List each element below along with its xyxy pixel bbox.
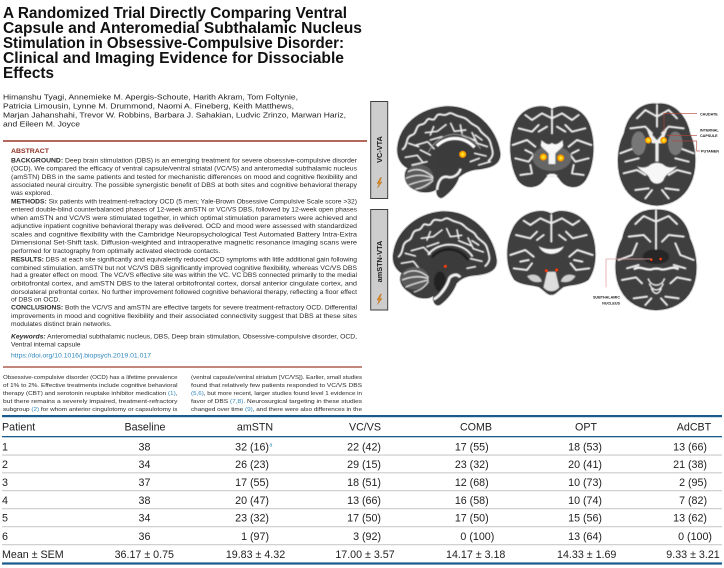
table row: patient 6: 36 (139, 531, 150, 543)
abstract conclusions section: CONCLUSIONS: Both the VC/VS and amSTN are effective targets for severe treatment-refractory OCD. Differential (11, 305, 358, 312)
keywords (11, 333, 357, 349)
table row: patient 2 (2, 459, 707, 471)
abstract results section: of DBS on OCD. (11, 297, 60, 304)
abstract methods section: adjunctive inpatient cognitive behavioral therapy was delivered. OCD and mood were assessed with standardized (11, 223, 357, 230)
table row: mean and SEM: 14.17 ± 3.18 (446, 549, 505, 561)
abstract background section (10, 158, 358, 197)
table row: patient 5: 23 (32) (235, 513, 269, 525)
title: Effects (3, 65, 54, 82)
brain scan: VC-VTA axial (618, 103, 696, 206)
table row: patient 4: 13 (66) (347, 495, 381, 507)
introduction text column 1: of 1% to 2%. Effective treatments include cognitive behavioral (3, 383, 178, 389)
table header: AdCBT (677, 422, 712, 434)
abstract conclusions section (11, 305, 358, 328)
introduction text column 2: (5,6), but more recent, larger studies found level 1 evidence in (191, 391, 362, 397)
table row: patient 5 (2, 513, 707, 525)
abstract results section: orbitofrontal cortex, and amSTN DBS to the lateral orbitofrontal cortex, dorsal anterior cingulate cortex, and (11, 280, 357, 288)
label: putamen: PUTAMEN (701, 149, 719, 153)
table row: patient 3: 17 (55) (235, 477, 269, 489)
table row: patient 1: a (270, 442, 272, 448)
table row: patient 6 (2, 531, 712, 543)
author list: Marjan Jahanshahi, Trevor W. Robbins, Barbara J. Sahakian, Ludvic Zrinzo, Marwan Hariz, (3, 112, 346, 120)
keywords: Ventral internal capsule (11, 342, 81, 349)
table row: patient 3: 2 (95) (679, 477, 707, 489)
stimulation hotspot (459, 150, 467, 158)
table row: patient 5: 5 (2, 513, 8, 525)
introduction text column 2: (ventral capsule/ventral striatum [VC/VS]). Earlier, small studies (191, 375, 362, 381)
abstract results section: combined stimulation. amSTN but not VC/VS DBS significantly improved cognitive flexibility, whereas VC/VS DBS (11, 265, 358, 272)
abstract conclusions section: improvements in mood and cognitive flexibility and their associated connectivity suggest that DBS at these sites (11, 313, 358, 320)
table row: patient 5: 13 (62) (673, 513, 707, 525)
divider: lower red rule (3, 366, 362, 368)
introduction text column 1: therapy (CBT) and serotonin reuptake inhibitor medication (1), (3, 391, 178, 397)
abstract results section: RESULTS: DBS at each site significantly and equivalently reduced OCD symptoms with little additional gain following (11, 256, 357, 264)
table row: patient 4: 4 (2, 495, 8, 507)
table row: patient 6: 13 (64) (568, 531, 602, 543)
label: internal capsule: INTERNAL (700, 128, 719, 132)
introduction text column 1 (3, 375, 178, 413)
abstract results section: dorsolateral prefrontal cortex. No further improvement followed cognitive behavioral therapy, reflecting a floor effect (11, 289, 357, 296)
table row: patient 1: 1 (2, 442, 8, 454)
table row: patient 3: 3 (2, 477, 8, 489)
abstract (10, 148, 358, 360)
table row: patient 2: 34 (139, 459, 150, 471)
label text: VC-VTA: VC-VTA (375, 135, 384, 163)
callout: subthalamic nucleus label: NUCLEUS (602, 301, 621, 305)
label panel: amSTN-VTA (371, 210, 388, 310)
abstract methods section: METHODS: Six patients with treatment-refractory OCD (5 men; Yale-Brown Obsessive Compulsive Scale score >32) (11, 198, 357, 206)
callout: subthalamic nucleus label: SUBTHALAMIC (593, 296, 620, 300)
title: Stimulation in Obsessive-Compulsive Disorder: (3, 35, 344, 52)
table row: patient 4: 16 (58) (455, 495, 489, 507)
table row: patient 5: 34 (139, 513, 150, 525)
abstract conclusions section: modulates distinct brain networks. (11, 321, 112, 328)
table row: patient 6: 3 (92) (353, 531, 381, 543)
table header (2, 422, 712, 434)
label panel: VC-VTA (371, 102, 388, 198)
author list: and Eileen M. Joyce (3, 122, 80, 128)
brain scan: amSTN-VTA coronal (507, 211, 596, 295)
abstract results section (11, 256, 358, 304)
table row: patient 2: 2 (2, 459, 8, 471)
abstract methods section: Dimensional Set-Shift task. Diffusion-weighted and intraoperative magnetic resonance imaging scans were (11, 240, 357, 247)
table row: patient 5: 15 (56) (568, 513, 602, 525)
author list (3, 94, 346, 128)
abstract methods section: performed for tractography from optimally activated electrode contacts. (11, 248, 220, 255)
table row: patient 1: 18 (53) (568, 442, 602, 454)
table row: mean and SEM: 9.33 ± 3.21 (666, 549, 720, 561)
table row: mean and SEM (2, 549, 720, 561)
table row: patient 2: 26 (23) (235, 459, 269, 471)
icon: lightning bolt (377, 178, 382, 188)
table row: patient 1 (2, 442, 707, 454)
table row: patient 6: 0 (100) (460, 531, 494, 543)
keywords: Keywords: Anteromedial subthalamic nucleus, DBS, Deep brain stimulation, Obsessive-compulsive disorder, OCD, (11, 333, 357, 340)
title: Capsule and Anteromedial Subthalamic Nucleus (3, 20, 362, 37)
table: patient OCD scores (2, 415, 722, 565)
abstract methods section: scales and cognitive flexibility with the Cambridge Neuropsychological Test Automated Battery Intra-Extra (11, 231, 357, 238)
abstract methods section: when amSTN and VC/VS were stimulated together, in which optimal stimulation parameters were achieved and (10, 215, 357, 222)
table row: patient 1: 17 (55) (455, 442, 489, 454)
table header: VC/VS (349, 422, 381, 434)
table row: patient 4: 7 (82) (679, 495, 707, 507)
brain scan: VC-VTA coronal (510, 106, 594, 187)
table row: patient 3: 37 (139, 477, 150, 489)
title: Clinical and Imaging Evidence for Dissociable (3, 50, 344, 67)
table row: patient 2: 21 (38) (673, 459, 707, 471)
introduction text column 1: but there remains a severely impaired, treatment-refractory (3, 399, 178, 405)
abstract methods section (10, 198, 358, 255)
stimulation hotspots (650, 257, 662, 261)
introduction text column 1: subgroup (2) for whom anterior cingulotomy or capsulotomy is (3, 407, 178, 413)
table row: patient 6: 6 (2, 531, 8, 543)
abstract results section: had a greater effect on mood. The VC/VS effective site was within the VC. VC DBS connected primarily to the medial (11, 272, 358, 279)
table header: Patient (2, 422, 35, 434)
table row: patient 2: 23 (32) (455, 459, 489, 471)
title (3, 5, 362, 82)
table row: patient 4: 10 (74) (568, 495, 602, 507)
stimulation hotspots (645, 137, 667, 144)
table header: Baseline (124, 422, 166, 434)
brain scan: amSTN-VTA axial (615, 209, 697, 311)
table row: mean and SEM: 17.00 ± 3.57 (335, 549, 395, 561)
introduction text column 2: favor of DBS (7,8) . Neurosurgical targeting in these studies (191, 399, 362, 405)
title: A Randomized Trial Directly Comparing Ventral (3, 5, 347, 22)
table row: patient 4: 38 (139, 495, 150, 507)
abstract background section: associated neural circuitry. The possible synergistic benefit of DBS at both sites and cognitive behavioral therapy (11, 182, 358, 189)
icon: lightning bolt (377, 294, 382, 304)
table row: patient 1: 13 (66) (673, 442, 707, 454)
divider: top red rule (3, 140, 367, 142)
stimulation hotspots (539, 153, 565, 162)
table row: patient 2: 29 (15) (347, 459, 381, 471)
callout: anatomical labels for VC-VTA axial (664, 112, 719, 153)
table row: patient 3 (2, 477, 707, 489)
abstract background section: was explored. (10, 190, 52, 197)
table row: patient 1: 32 (16) (235, 442, 269, 454)
table row: patient 1: 38 (139, 442, 150, 454)
label: internal capsule: CAPSULE (700, 134, 718, 138)
author list: Patricia Limousin, Lynne M. Drummond, Naomi A. Fineberg, Keith Matthews, (3, 104, 294, 110)
table row: patient 6: 1 (97) (241, 531, 269, 543)
introduction text column 2 (191, 375, 362, 413)
brain scan: VC-VTA sagittal (397, 106, 501, 198)
label text: amSTN-VTA: amSTN-VTA (375, 240, 384, 282)
label: caudate: CAUDATE (700, 112, 718, 116)
table row: patient 1: 22 (42) (347, 442, 381, 454)
table row: mean and SEM: 36.17 ± 0.75 (115, 549, 174, 561)
table row: patient 4: 20 (47) (235, 495, 269, 507)
table row: patient 2: 20 (41) (568, 459, 602, 471)
table row: patient 5: 17 (50) (455, 513, 489, 525)
table row: patient 5: 17 (50) (347, 513, 381, 525)
table row: mean and SEM: 14.33 ± 1.69 (557, 549, 616, 561)
introduction text column 1: Obsessive-compulsive disorder (OCD) has a lifetime prevalence (3, 375, 178, 381)
abstract background section: (amSTN) DBS in the same patients and tested for mechanistic differences on mood and cognitive flexibility and (11, 174, 357, 181)
table header: OPT (575, 422, 597, 434)
callout: subthalamic nucleus label (593, 259, 651, 305)
table row: mean and SEM: 19.83 ± 4.32 (226, 549, 285, 561)
table row: patient 4 (2, 495, 707, 507)
table row: patient 3: 10 (73) (568, 477, 602, 489)
abstract methods section: entered double-blind counterbalanced phases of 12-week amSTN or VC/VS DBS, followed by 12-week open phases (11, 207, 358, 214)
table header: amSTN (237, 422, 273, 434)
table row: patient 3: 18 (51) (347, 477, 381, 489)
stimulation hotspot (443, 264, 447, 268)
table row: patient 6: 0 (100) (678, 531, 712, 543)
stimulation hotspots (544, 268, 559, 273)
table row: patient 3: 12 (68) (455, 477, 489, 489)
abstract background section: (OCD). We compared the efficacy of ventral capsule/ventral striatal (VC/VS) and anteromedial subthalamic nucleus (11, 166, 358, 173)
doi link: https://doi.org/10.1016/j.biopsych.2019.01.017 (11, 353, 151, 360)
author list: Himanshu Tyagi, Annemieke M. Apergis-Schoute, Harith Akram, Tom Foltynie, (3, 94, 298, 102)
introduction text column 2: found that relatively few patients responded to VC/VS DBS (191, 383, 362, 389)
table row: mean and SEM: Mean ± SEM (2, 549, 64, 561)
abstract heading: ABSTRACT (11, 148, 50, 155)
introduction text column 2: changed over time (9), and there were also differences in the (191, 407, 362, 413)
brain scan: amSTN-VTA sagittal (393, 211, 497, 306)
table header: COMB (460, 422, 492, 434)
abstract background section: BACKGROUND: Deep brain stimulation (DBS) is an emerging treatment for severe obsessive-compulsive disorder (11, 158, 358, 164)
